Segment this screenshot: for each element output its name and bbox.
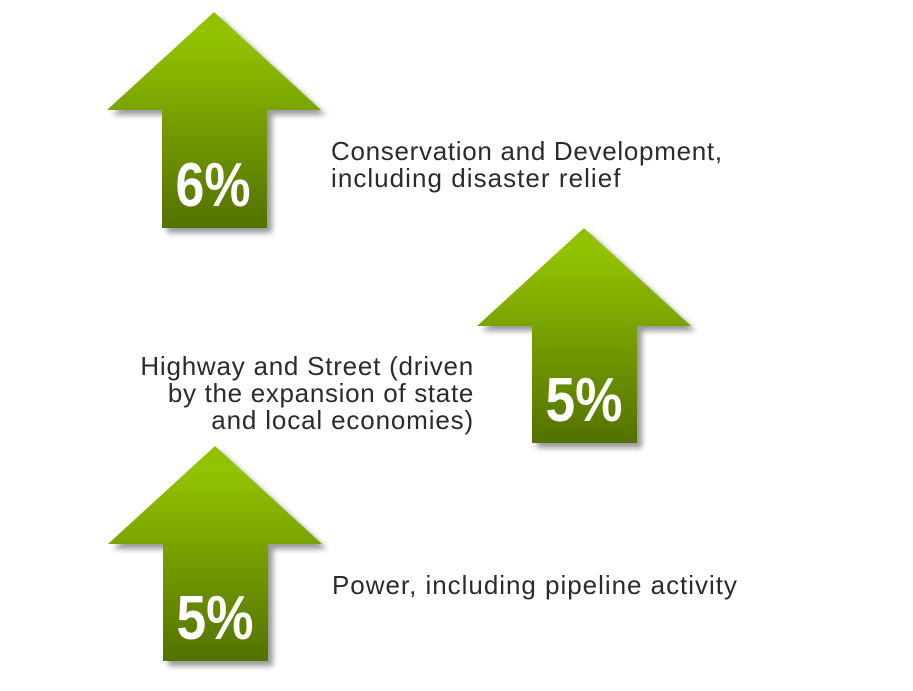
label: highway and street: Highway and Street (driven <box>140 351 474 381</box>
arrow: 6% conservation and development: 6% <box>176 151 250 220</box>
label: highway and street: and local economies) <box>211 405 474 435</box>
label: highway and street <box>140 351 474 435</box>
label: conservation and development <box>331 136 723 193</box>
label: conservation and development: Conservation and Development, <box>331 136 723 166</box>
arrow: 5% power: 5% <box>176 584 254 653</box>
arrow: 6% conservation and development <box>107 12 326 233</box>
label: power: Power, including pipeline activity <box>332 570 738 600</box>
arrow: 5% highway and street <box>477 228 696 448</box>
label: highway and street: by the expansion of state <box>168 378 474 408</box>
label: conservation and development: including disaster relief <box>331 163 621 193</box>
arrow: 5% power <box>108 446 327 666</box>
arrow: 5% highway and street: 5% <box>546 366 622 435</box>
